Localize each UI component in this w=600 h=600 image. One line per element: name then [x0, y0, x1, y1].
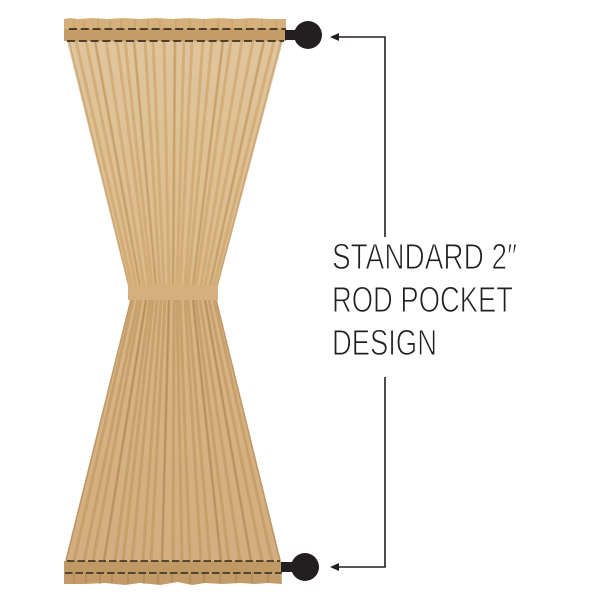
bottom arrow	[330, 377, 385, 571]
bottom rod and finial	[281, 553, 319, 581]
upper curtain panel	[67, 41, 283, 286]
top rod pocket header	[64, 18, 286, 41]
curtain panel	[64, 18, 286, 585]
bottom stitch lines	[65, 561, 282, 573]
label: standard 2 inch rod pocket design: ROD POCKET	[332, 279, 513, 320]
tieback band	[128, 285, 218, 300]
top rod and finial	[285, 21, 322, 49]
bottom rod pocket header	[64, 561, 282, 585]
label: standard 2 inch rod pocket design: STANDARD 2″	[332, 236, 517, 277]
lower curtain panel	[65, 300, 281, 561]
top stitch lines	[67, 29, 286, 41]
label: standard 2 inch rod pocket design: DESIGN	[332, 322, 437, 363]
top arrow	[330, 33, 385, 237]
label: standard 2 inch rod pocket design	[332, 236, 517, 363]
